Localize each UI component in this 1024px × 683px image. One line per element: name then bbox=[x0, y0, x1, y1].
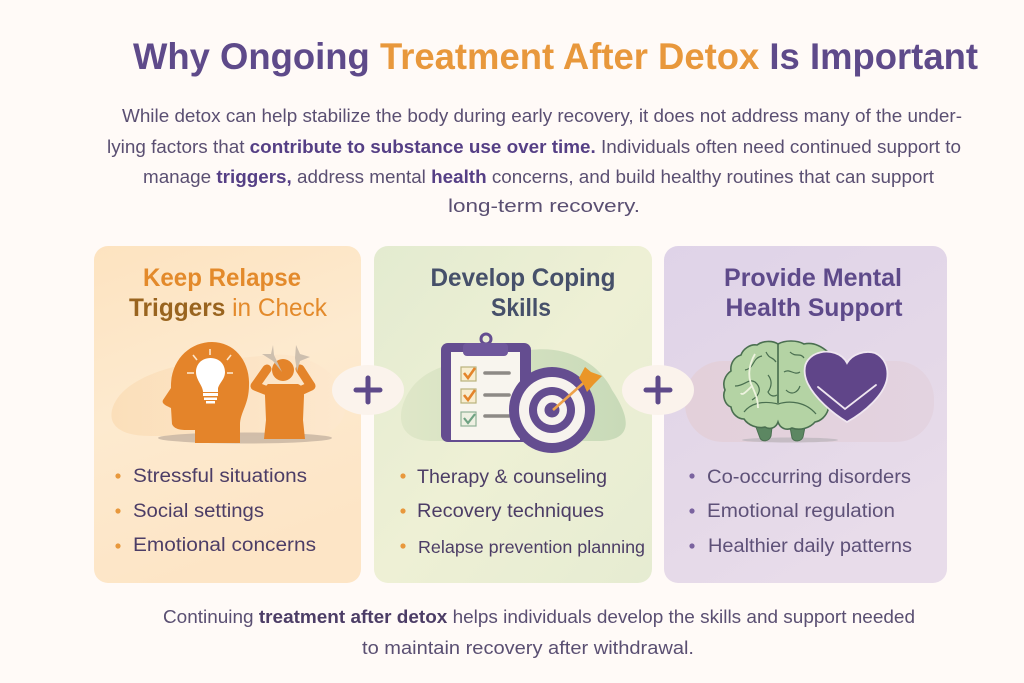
heading: provide mental health support: Provide Mental bbox=[724, 264, 902, 292]
heading: develop coping skills: Develop Coping bbox=[430, 264, 616, 292]
heading: provide mental health support: Health Support bbox=[726, 294, 903, 322]
bullet list: Co-occurring disorders bbox=[707, 467, 911, 488]
intro paragraph: long-term recovery. bbox=[448, 195, 640, 216]
intro paragraph: While detox can help stabilize the body during early recovery, it does not address many of the under- bbox=[122, 105, 962, 126]
closing statement: Continuing treatment after detox helps individuals develop the skills and support needed bbox=[163, 606, 915, 627]
heading: develop coping skills: Skills bbox=[491, 294, 551, 322]
panel: develop coping skills bbox=[374, 246, 652, 583]
plus connector 1 bbox=[332, 365, 404, 415]
heading: keep relapse triggers: Keep Relapse bbox=[143, 264, 301, 292]
bullet list bbox=[689, 467, 912, 557]
heading: keep relapse triggers bbox=[129, 264, 327, 322]
bullet list: Healthier daily patterns bbox=[708, 536, 912, 557]
icon: brain and heart bbox=[685, 341, 934, 442]
icon: head with light bulb and stressed person bbox=[111, 342, 345, 444]
bullet list bbox=[400, 467, 645, 557]
bullet list: Therapy & counseling bbox=[417, 467, 607, 488]
plus connector 2 bbox=[622, 365, 694, 415]
bullet list bbox=[115, 466, 316, 556]
closing statement bbox=[163, 606, 915, 658]
heading: develop coping skills bbox=[430, 264, 616, 322]
bullet list: Social settings bbox=[133, 501, 264, 522]
bullet list: Emotional concerns bbox=[133, 535, 316, 556]
closing statement: to maintain recovery after withdrawal. bbox=[362, 637, 694, 658]
icon: clipboard and target bbox=[401, 334, 626, 453]
panel: provide mental health support bbox=[664, 246, 947, 583]
heading: provide mental health support bbox=[724, 264, 903, 322]
bullet list: Relapse prevention planning bbox=[418, 537, 645, 557]
bullet list: Stressful situations bbox=[133, 466, 307, 487]
title: Why Ongoing Treatment After Detox Is Important bbox=[133, 36, 978, 77]
bullet list: Emotional regulation bbox=[707, 501, 895, 522]
intro paragraph: lying factors that contribute to substance use over time. Individuals often need continued support to bbox=[107, 136, 961, 157]
heading: keep relapse triggers: Triggers in Check bbox=[129, 294, 327, 322]
bullet list: Recovery techniques bbox=[417, 501, 604, 522]
intro paragraph bbox=[107, 105, 962, 216]
panel: keep relapse triggers in check bbox=[94, 246, 361, 583]
intro paragraph: manage triggers, address mental health concerns, and build healthy routines that can support bbox=[143, 166, 934, 187]
